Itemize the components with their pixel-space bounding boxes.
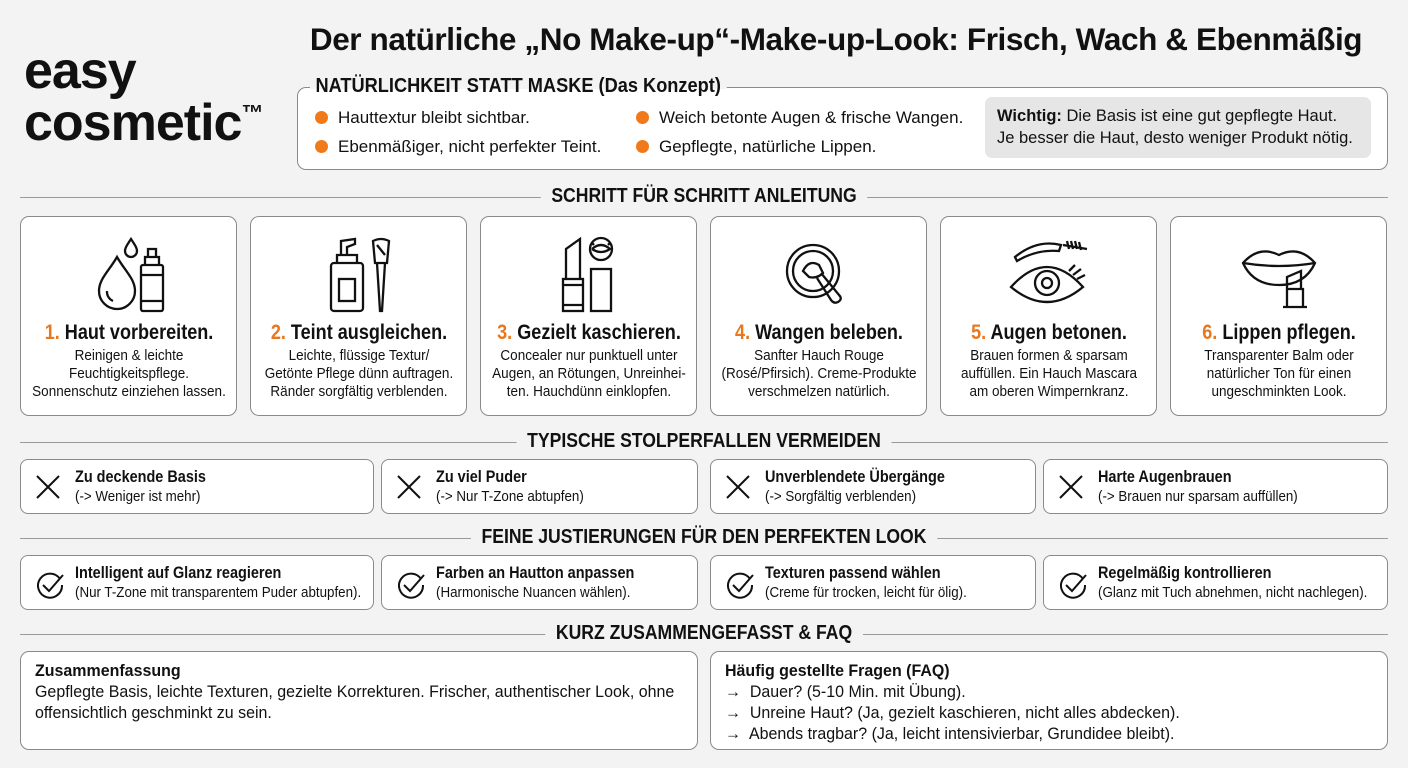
- bullets 2: Gepflegte, natürliche Lippen.: [659, 137, 876, 156]
- pitfall 2: [381, 459, 698, 514]
- step text: Concealer nur punktuell unter: [500, 347, 677, 364]
- faq text: → Abends tragbar? (Ja, leicht intensivierbar, Grundidee bleibt).: [725, 724, 1174, 743]
- faq text: → Unreine Haut? (Ja, gezielt kaschieren, nicht alles abdecken).: [725, 703, 1180, 722]
- step text: [492, 347, 686, 400]
- step text: auffüllen. Ein Hauch Mascara: [960, 365, 1137, 382]
- step title: 3. Gezielt kaschieren.: [497, 321, 680, 344]
- panel: concept: [297, 87, 1388, 170]
- summary text: [35, 661, 674, 722]
- tip 3: Texturen passend wählen: [765, 563, 941, 582]
- pitfall 4: Harte Augenbrauen: [1098, 467, 1232, 486]
- bullets: Ebenmäßiger, nicht perfekter Teint.: [338, 137, 601, 156]
- icon: lips and lipstick: [1242, 250, 1316, 308]
- tip 2: Farben an Hautton anpassen: [436, 563, 634, 582]
- card 5: [940, 216, 1157, 416]
- step text: Sanfter Hauch Rouge: [754, 347, 883, 364]
- step text: Brauen formen & sparsam: [970, 347, 1127, 364]
- step title: 5. Augen betonen.: [971, 321, 1126, 344]
- card 6: [1170, 216, 1387, 416]
- step text: Reinigen & leichte: [74, 347, 183, 364]
- title: Der natürliche „No Make-up“-Make-up-Look: Frisch, Wach & Ebenmäßig: [310, 21, 1362, 57]
- heading: steps: SCHRITT FÜR SCHRITT ANLEITUNG: [551, 185, 857, 207]
- summary text: offensichtlich geschminkt zu sein.: [35, 703, 272, 722]
- step text: ten. Hauchdünn einklopfen.: [506, 383, 671, 400]
- pitfall 2: Zu viel Puder: [436, 467, 527, 486]
- panel: faq: [710, 651, 1388, 750]
- step text: Sonnenschutz einziehen lassen.: [32, 383, 225, 400]
- step text: Transparenter Balm oder: [1204, 347, 1353, 364]
- step text: [32, 347, 225, 400]
- icon: blush compact with brush: [786, 244, 842, 304]
- heading: adjustments: FEINE JUSTIERUNGEN FÜR DEN PERFEKTEN LOOK: [482, 526, 926, 548]
- heading: summary: KURZ ZUSAMMENGEFASST & FAQ: [556, 622, 852, 644]
- step text: Getönte Pflege dünn auftragen.: [264, 365, 453, 382]
- logo: [24, 42, 262, 152]
- callout: wichtig: Je besser die Haut, desto weniger Produkt nötig.: [997, 129, 1353, 147]
- summary text: Gepflegte Basis, leichte Texturen, gezielte Korrekturen. Frischer, authentischer Look, ohne: [35, 682, 674, 701]
- panel: summary: [20, 651, 698, 750]
- step text: Feuchtigkeitspflege.: [68, 365, 189, 382]
- heading: pitfalls: TYPISCHE STOLPERFALLEN VERMEIDEN: [527, 430, 881, 452]
- icon: eye with brow and mascara: [1009, 240, 1088, 304]
- faq text: → Dauer? (5-10 Min. mit Übung).: [725, 682, 966, 701]
- pitfall 1: [20, 459, 374, 514]
- card 4: [710, 216, 927, 416]
- callout: wichtig: Wichtig: Die Basis ist eine gut gepflegte Haut.: [997, 107, 1337, 125]
- bullets: [315, 108, 601, 156]
- icon: foundation and brush: [330, 238, 390, 312]
- faq text: Häufig gestellte Fragen (FAQ): [725, 661, 950, 680]
- tip 4: [1043, 555, 1388, 610]
- bullets: Hauttextur bleibt sichtbar.: [338, 108, 530, 127]
- card 3: [480, 216, 697, 416]
- tip 4: Regelmäßig kontrollieren: [1098, 563, 1271, 582]
- step text: Ränder sorgfältig verblenden.: [270, 383, 447, 400]
- callout: wichtig: [985, 97, 1371, 158]
- tip 2: [381, 555, 698, 610]
- pitfall 1: Zu deckende Basis: [75, 467, 206, 486]
- logo: easy: [24, 42, 136, 100]
- step title: 6. Lippen pflegen.: [1202, 321, 1355, 344]
- pitfall 3: Unverblendete Übergänge: [765, 467, 945, 486]
- pitfall 3: (-> Sorgfältig verblenden): [765, 488, 916, 505]
- tip 3: [710, 555, 1036, 610]
- pitfall 1: (-> Weniger ist mehr): [75, 488, 201, 505]
- tip 1: Intelligent auf Glanz reagieren: [75, 563, 281, 582]
- tip 2: (Harmonische Nuancen wählen).: [436, 584, 630, 601]
- icon: concealer and eye: [562, 236, 614, 312]
- bullets 2: Weich betonte Augen & frische Wangen.: [659, 108, 963, 127]
- step text: [721, 347, 916, 400]
- pitfall 4: (-> Brauen nur sparsam auffüllen): [1098, 488, 1298, 505]
- tip 1: (Nur T-Zone mit transparentem Puder abtupfen).: [75, 584, 361, 601]
- tip 1: [20, 555, 374, 610]
- tip 4: (Glanz mit Tuch abnehmen, nicht nachlegen).: [1098, 584, 1367, 601]
- step text: am oberen Wimpernkranz.: [969, 383, 1128, 400]
- icon: drops and bottle: [98, 237, 164, 312]
- step text: ungeschminkten Look.: [1211, 383, 1346, 400]
- pitfall 2: (-> Nur T-Zone abtupfen): [436, 488, 584, 505]
- step text: (Rosé/Pfirsich). Creme-Produkte: [721, 365, 916, 382]
- step text: [1204, 347, 1354, 400]
- summary text: Zusammenfassung: [35, 661, 181, 680]
- step text: verschmelzen natürlich.: [748, 383, 889, 400]
- bullets 2: [636, 108, 963, 156]
- step text: natürlicher Ton für einen: [1206, 365, 1351, 382]
- concept heading: NATÜRLICHKEIT STATT MASKE (Das Konzept): [315, 75, 721, 97]
- pitfall 4: [1043, 459, 1388, 514]
- step text: Leichte, flüssige Textur/: [288, 347, 429, 364]
- step title: 1. Haut vorbereiten.: [44, 321, 213, 344]
- faq text: [725, 661, 1180, 743]
- pitfall 3: [710, 459, 1036, 514]
- step text: Augen, an Rötungen, Unreinhei-: [492, 365, 685, 382]
- step title: 4. Wangen beleben.: [735, 321, 902, 344]
- tip 3: (Creme für trocken, leicht für ölig).: [765, 584, 967, 601]
- card 2: [250, 216, 467, 416]
- card 1: [20, 216, 237, 416]
- step text: [264, 347, 453, 400]
- step title: 2. Teint ausgleichen.: [270, 321, 447, 344]
- step text: [960, 347, 1137, 400]
- logo: cosmetic™: [24, 94, 262, 152]
